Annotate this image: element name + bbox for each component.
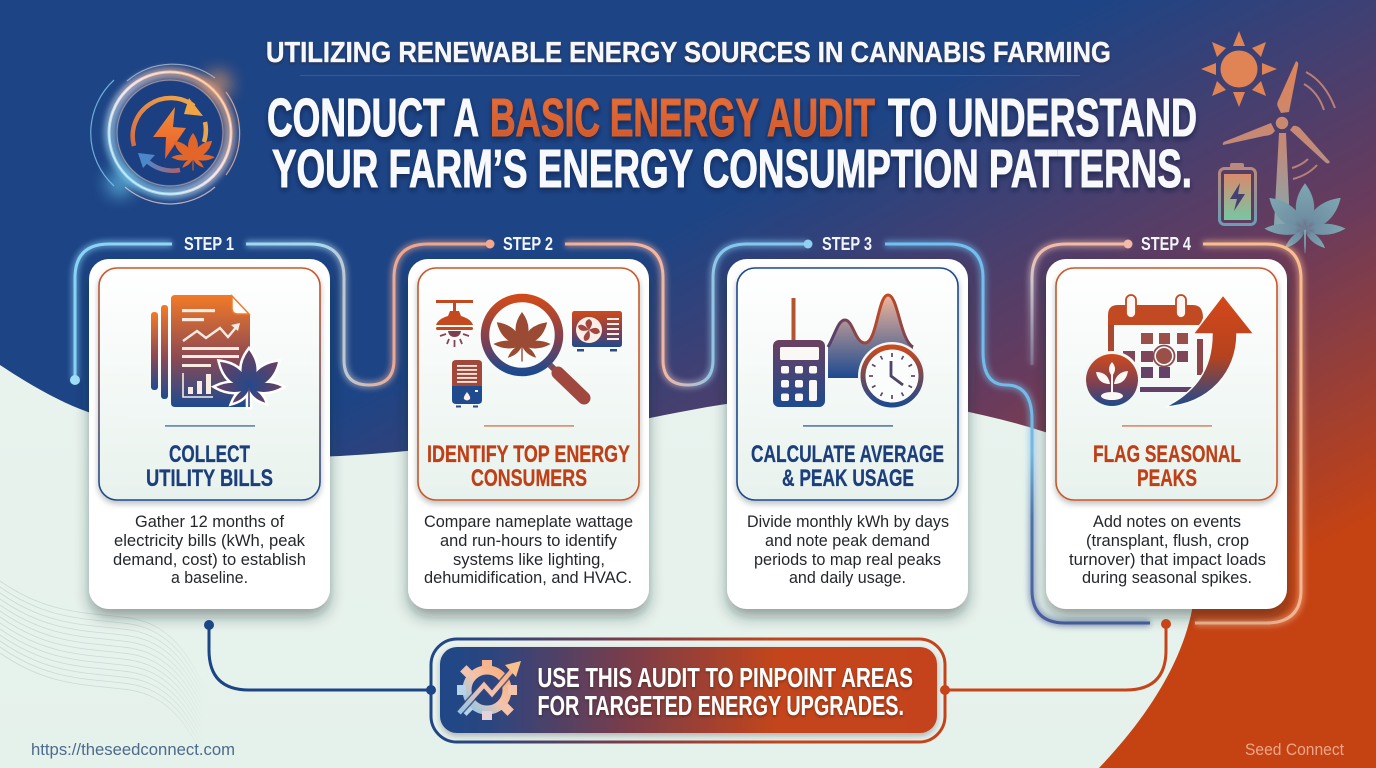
header: main title: BASIC ENERGY AUDIT <box>490 88 875 148</box>
title: flag seasonal peaks <box>1093 441 1241 492</box>
icon: air conditioner <box>572 311 622 352</box>
icon: top right cannabis leaf <box>1264 183 1346 253</box>
icon: energy logo badge <box>91 64 240 204</box>
description: step 1: electricity bills (kWh, peak <box>114 532 306 550</box>
header: main title <box>267 88 1197 199</box>
icon: calculator <box>773 298 825 407</box>
step label 4: STEP 4 <box>1141 234 1191 254</box>
icon: calendar <box>1108 295 1203 392</box>
description: step 4: during seasonal spikes. <box>1082 569 1252 587</box>
description: step 3 <box>747 513 949 587</box>
description: step 1: a baseline. <box>171 569 248 587</box>
icon: usage peaks chart <box>828 295 913 378</box>
icon: wind turbine <box>1223 61 1335 225</box>
title: collect utility bills: UTILITY BILLS <box>146 465 273 492</box>
title: calculate average and peak usage <box>751 441 944 492</box>
icon: battery <box>1220 163 1256 224</box>
panel: step 3 calculate average and peak usage <box>727 259 968 609</box>
title: identify top energy consumers: CONSUMERS <box>471 465 587 492</box>
description: step 4: Add notes on events <box>1093 513 1241 531</box>
description: step 4: turnover) that impact loads <box>1069 551 1266 569</box>
description: step 3: and daily usage. <box>789 569 906 587</box>
callout text <box>538 662 913 721</box>
step label 3: STEP 3 <box>822 234 872 254</box>
icon: ceiling lamp <box>436 300 473 347</box>
description: step 3: Divide monthly kWh by days <box>747 513 949 531</box>
description: step 4: (transplant, flush, crop <box>1086 532 1249 550</box>
header: main title: CONDUCT A <box>267 88 479 148</box>
panel: step 4 flag seasonal peaks <box>1046 259 1287 609</box>
icon: gear with rising arrow <box>457 660 521 720</box>
description: step 1: Gather 12 months of <box>135 513 284 531</box>
step label 2: STEP 2 <box>503 234 553 254</box>
title: calculate average and peak usage: & PEAK USAGE <box>782 465 914 492</box>
callout text: FOR TARGETED ENERGY UPGRADES. <box>538 690 904 721</box>
description: step 2 <box>424 513 633 587</box>
description: step 2: dehumidification, and HVAC. <box>424 569 632 587</box>
description: step 2: and run-hours to identify <box>440 532 618 550</box>
connector: step 1 to call to action <box>204 620 431 690</box>
icon: sun <box>1201 31 1277 107</box>
icon: dehumidifier <box>452 360 482 408</box>
connector lines between steps <box>70 240 1301 623</box>
footer: website url: https://theseedconnect.com <box>31 740 235 759</box>
panel: step 1 collect utility bills <box>89 259 330 609</box>
description: step 1: demand, cost) to establish <box>113 551 306 569</box>
callout: use this audit <box>426 639 950 742</box>
title: flag seasonal peaks: PEAKS <box>1137 465 1197 492</box>
title: identify top energy consumers: IDENTIFY TOP ENERGY <box>427 441 630 468</box>
icon: plant badge <box>1083 351 1141 409</box>
title: collect utility bills <box>146 441 273 492</box>
icon: clock <box>858 342 926 410</box>
title: collect utility bills: COLLECT <box>169 441 250 468</box>
light lower wave area <box>0 365 1193 768</box>
panel: step 2 identify top energy consumers <box>408 259 649 609</box>
description: step 1 <box>113 513 306 587</box>
callout text: USE THIS AUDIT TO PINPOINT AREAS <box>538 662 913 693</box>
title: identify top energy consumers <box>427 441 630 492</box>
icon: rising arrow <box>1165 295 1254 407</box>
description: step 3: periods to map real peaks <box>754 551 941 569</box>
header: supertitle: UTILIZING RENEWABLE ENERGY SOURCES IN CANNABIS FARMING <box>266 37 1111 69</box>
title: flag seasonal peaks: FLAG SEASONAL <box>1093 441 1241 468</box>
description: step 2: Compare nameplate wattage <box>424 513 633 531</box>
description: step 2: systems like lighting, <box>453 551 605 569</box>
title: calculate average and peak usage: CALCULATE AVERAGE <box>751 441 944 468</box>
step label 1: STEP 1 <box>184 234 234 254</box>
description: step 4 <box>1069 513 1266 587</box>
footer: brand name: Seed Connect <box>1245 740 1344 759</box>
icon: utility bills with leaf <box>151 295 283 407</box>
connector: step 4 to call to action <box>945 619 1171 690</box>
icon: magnifying glass with leaf <box>485 298 584 398</box>
header: main title: TO UNDERSTAND <box>888 88 1197 148</box>
description: step 3: and note peak demand <box>765 532 930 550</box>
